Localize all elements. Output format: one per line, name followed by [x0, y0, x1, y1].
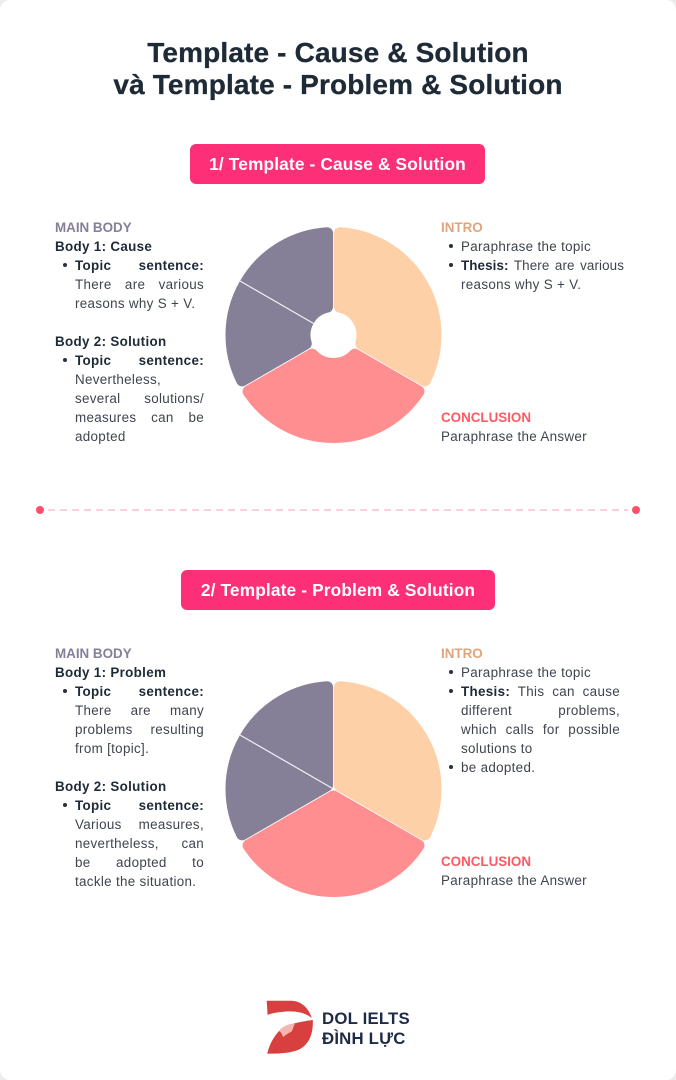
text block: section 1 main body: measures can be: [75, 410, 204, 425]
title: và Template - Problem & Solution: [113, 69, 563, 100]
text block: section 1 main body: Topic sentence:: [75, 258, 204, 273]
text block: section 2 intro: different problems,: [461, 703, 620, 718]
chart: section 2 pie: [226, 681, 442, 897]
text block: section 2 intro: Thesis: This can cause: [461, 684, 620, 699]
text block: section 2 main body: be adopted to: [75, 855, 204, 870]
heading: section 2: [181, 570, 495, 610]
text block: section 2 main body: [55, 646, 204, 889]
heading: section 2: 2/ Template - Problem & Solution: [201, 580, 475, 600]
heading: section 1: 1/ Template - Cause & Solution: [209, 154, 466, 174]
text block: section 1 main body: several solutions/: [75, 391, 204, 406]
text block: section 2 main body: Body 1: Problem: [55, 665, 166, 680]
text block: section 2 main body: MAIN BODY: [55, 646, 132, 661]
text block: section 2 intro: which calls for possible: [461, 722, 620, 737]
text block: section 2 main body: problems resulting: [75, 722, 204, 737]
text block: section 1 intro: Thesis: There are various: [461, 258, 624, 273]
heading: section 1: [190, 144, 485, 184]
text block: section 2 conclusion: CONCLUSION: [441, 854, 531, 869]
text block: section 1 main body: Nevertheless,: [75, 372, 161, 387]
text block: section 2 intro: Paraphrase the topic: [461, 665, 591, 680]
text block: section 2 main body: Various measures,: [75, 817, 204, 832]
text block: section 1 main body: Topic sentence:: [75, 353, 204, 368]
text block: section 1 intro: [441, 220, 624, 292]
text block: section 2 main body: Topic sentence:: [75, 684, 204, 699]
text block: section 1 main body: reasons why S + V.: [75, 296, 195, 311]
slice: main body: [194, 678, 370, 834]
text block: section 1 main body: Body 2: Solution: [55, 334, 166, 349]
chart: section 1 donut: [226, 227, 442, 443]
slice: intro: [340, 687, 436, 834]
icon: logo mark: [266, 1000, 313, 1054]
title: [113, 37, 563, 100]
text block: section 2 conclusion: [441, 854, 587, 888]
slice: main body: [194, 224, 370, 380]
text block: section 2 conclusion: Paraphrase the Answer: [441, 873, 587, 888]
text block: section 1 intro: reasons why S + V.: [461, 277, 581, 292]
logo wordmark: DOL IELTS: [322, 1009, 410, 1028]
text block: section 2 main body: Topic sentence:: [75, 798, 204, 813]
text block: section 2 intro: solutions to: [461, 741, 533, 756]
text block: section 1 main body: There are various: [75, 277, 204, 292]
slice: intro: [340, 233, 436, 380]
slice: conclusion: [243, 318, 418, 474]
divider: [36, 506, 640, 514]
text block: section 1 main body: adopted: [75, 429, 126, 444]
logo wordmark: [322, 1009, 410, 1048]
text block: section 2 main body: There are many: [75, 703, 204, 718]
text block: section 2 main body: Body 2: Solution: [55, 779, 166, 794]
text block: section 1 intro: Paraphrase the topic: [461, 239, 591, 254]
text block: section 2 intro: INTRO: [441, 646, 483, 661]
text block: section 2 main body: nevertheless, can: [75, 836, 204, 851]
logo wordmark: ĐÌNH LỰC: [322, 1029, 406, 1048]
text block: section 1 main body: [55, 220, 204, 444]
slice: conclusion: [243, 772, 418, 928]
title: Template - Cause & Solution: [147, 37, 529, 68]
text block: section 1 conclusion: Paraphrase the Answer: [441, 429, 587, 444]
text block: section 1 conclusion: CONCLUSION: [441, 410, 531, 425]
text block: section 1 main body: MAIN BODY: [55, 220, 132, 235]
text block: section 1 intro: INTRO: [441, 220, 483, 235]
text block: section 1 conclusion: [441, 410, 587, 444]
text block: section 1 main body: Body 1: Cause: [55, 239, 152, 254]
logo: [266, 1000, 410, 1054]
text block: section 2 intro: be adopted.: [461, 760, 535, 775]
text block: section 2 intro: [441, 646, 620, 775]
text block: section 2 main body: from [topic].: [75, 741, 149, 756]
text block: section 2 main body: tackle the situation.: [75, 874, 196, 889]
